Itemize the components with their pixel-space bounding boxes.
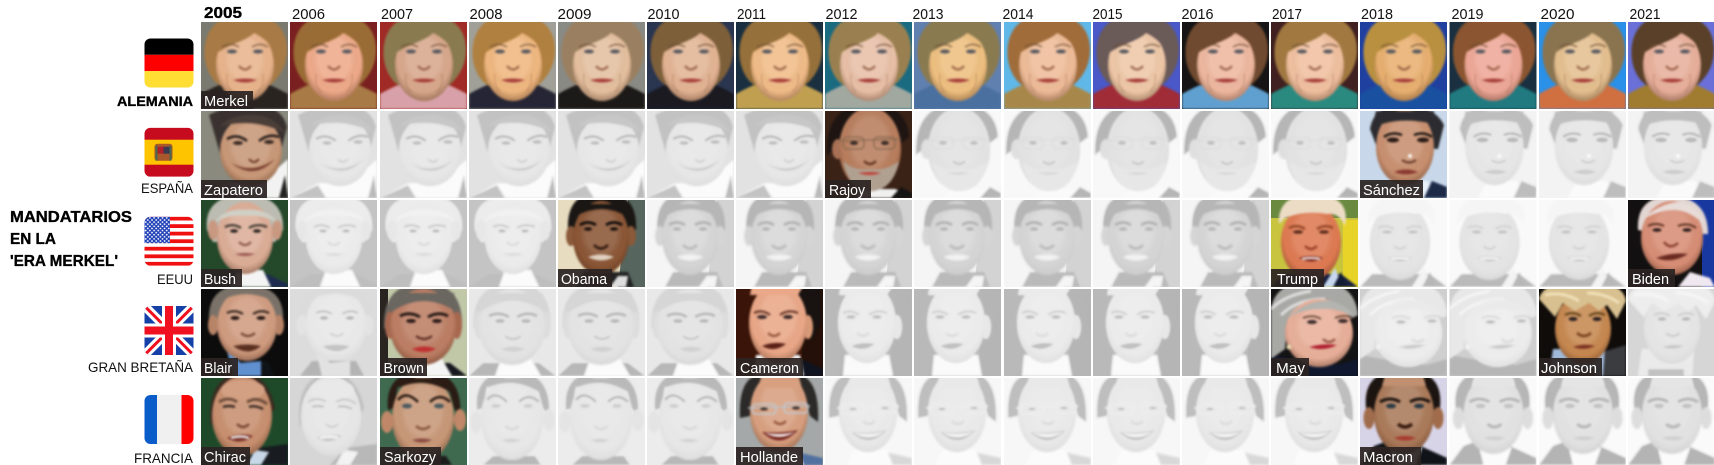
photo: Obama 2009 with name tag (558, 192, 645, 288)
icon: flag of France (144, 395, 194, 444)
photo: Bush 2005 with name tag: Bush (204, 272, 236, 288)
year headings: 2019 (1452, 6, 1484, 23)
year headings: 2020 (1540, 6, 1574, 23)
year headings: 2009 (558, 6, 592, 23)
year headings: 2008 (470, 6, 502, 23)
year headings (204, 5, 1660, 23)
icon: flag of Spain (144, 128, 194, 177)
photo: Biden 2021 with name tag (1628, 196, 1714, 288)
photo: Merkel 2005 with name tag (201, 14, 288, 110)
faded photos: Sarkozy 2008-2010 (469, 370, 734, 465)
icon: flag of Germany (144, 38, 194, 88)
photo: Bush 2005 with name tag (201, 194, 288, 288)
year headings: 2018 (1361, 6, 1393, 23)
photo: Macron 2018 with name tag (1360, 370, 1447, 465)
year headings: 2014 (1002, 6, 1034, 23)
photo: Obama 2009 with name tag: Obama (561, 272, 608, 288)
faded photos: Sánchez 2019-2021 (1450, 105, 1714, 198)
photo: Brown 2007 with name tag (380, 283, 467, 377)
title (10, 209, 132, 270)
photo: Blair 2005 with name tag (201, 285, 288, 377)
photo: Merkel 2005 with name tag: Merkel (204, 94, 248, 110)
photo: Trump 2017 with name tag: Trump (1277, 272, 1318, 288)
photos: Merkel 2006-2021 (290, 14, 1714, 109)
photo: Rajoy 2012 with name tag: Rajoy (829, 183, 866, 199)
photo: Sánchez 2018 with name tag (1360, 105, 1447, 199)
year headings: 2021 (1630, 6, 1660, 23)
row: Francia (201, 370, 1714, 465)
photo: Cameron 2011 with name tag (736, 283, 823, 377)
faded photos: Trump 2018-2020 (1360, 194, 1626, 287)
title: 'ERA MERKEL' (10, 253, 118, 270)
photo: Rajoy 2012 with name tag (825, 103, 912, 199)
year headings: 2012 (826, 6, 858, 23)
year headings: 2007 (381, 6, 413, 23)
faded photos: Brown 2008-2010 (469, 283, 734, 376)
row: Alemania, Merkel 2005-2021 (201, 14, 1714, 110)
faded photos: Bush 2006-2008 (290, 194, 556, 287)
row: Gran Bretaña (201, 281, 1714, 377)
faded photos: Obama 2010-2016 (647, 192, 1269, 287)
photo: Johnson 2020 with name tag (1539, 281, 1626, 377)
year headings: 2005 (204, 5, 242, 22)
photo: Brown 2007 with name tag: Brown (384, 361, 424, 377)
faded photos: May 2018-2019 (1360, 281, 1536, 376)
faded photos: Cameron 2012-2016 (825, 283, 1269, 376)
title: EN LA (10, 231, 56, 248)
faded photos: Rajoy 2013-2017 (914, 103, 1358, 198)
country label: Gran Bretaña: GRAN BRETAÑA (88, 359, 194, 375)
photo: Chirac 2005 with name tag (201, 372, 288, 465)
faded photos: Zapatero 2006-2011 (290, 105, 823, 198)
photo: Zapatero 2005 with name tag: Zapatero (204, 183, 263, 199)
photo: Zapatero 2005 with name tag (201, 105, 288, 199)
photo: Biden 2021 with name tag: Biden (1632, 272, 1669, 288)
faded photo: Johnson 2021 (1628, 281, 1714, 376)
photo: Johnson 2020 with name tag: Johnson (1541, 361, 1597, 377)
year headings: 2011 (737, 6, 766, 23)
row: España (201, 103, 1714, 199)
photo: Trump 2017 with name tag (1271, 194, 1358, 288)
photo: Hollande 2011 with name tag (736, 372, 823, 465)
row: EEUU (201, 192, 1714, 288)
year headings: 2015 (1092, 6, 1122, 23)
year headings: 2013 (912, 6, 944, 23)
country label: España: ESPAÑA (141, 180, 194, 196)
faded photos: Macron 2019-2021 (1450, 370, 1714, 465)
year headings: 2016 (1182, 6, 1214, 23)
photo: Sarkozy 2007 with name tag (380, 370, 467, 465)
photo: Blair 2005 with name tag: Blair (204, 361, 232, 377)
faded photo: Blair 2006 (290, 285, 377, 376)
title: MANDATARIOS (10, 209, 132, 226)
photo: Sánchez 2018 with name tag: Sánchez (1363, 183, 1420, 199)
icon: flag of USA (144, 217, 194, 266)
country label: EEUU: EEUU (157, 271, 193, 287)
year headings: 2010 (648, 6, 680, 23)
photo: May 2017 with name tag: May (1276, 361, 1306, 377)
faded photo: Chirac 2006 (290, 372, 377, 465)
country label: Alemania: ALEMANIA (117, 93, 193, 109)
year headings: 2017 (1272, 6, 1302, 23)
year headings: 2006 (292, 6, 325, 23)
icon: flag of Great Britain (144, 306, 194, 355)
photo: May 2017 with name tag (1271, 281, 1358, 377)
photo: Cameron 2011 with name tag: Cameron (740, 361, 799, 377)
faded photos: Hollande 2012-2017 (825, 372, 1358, 465)
